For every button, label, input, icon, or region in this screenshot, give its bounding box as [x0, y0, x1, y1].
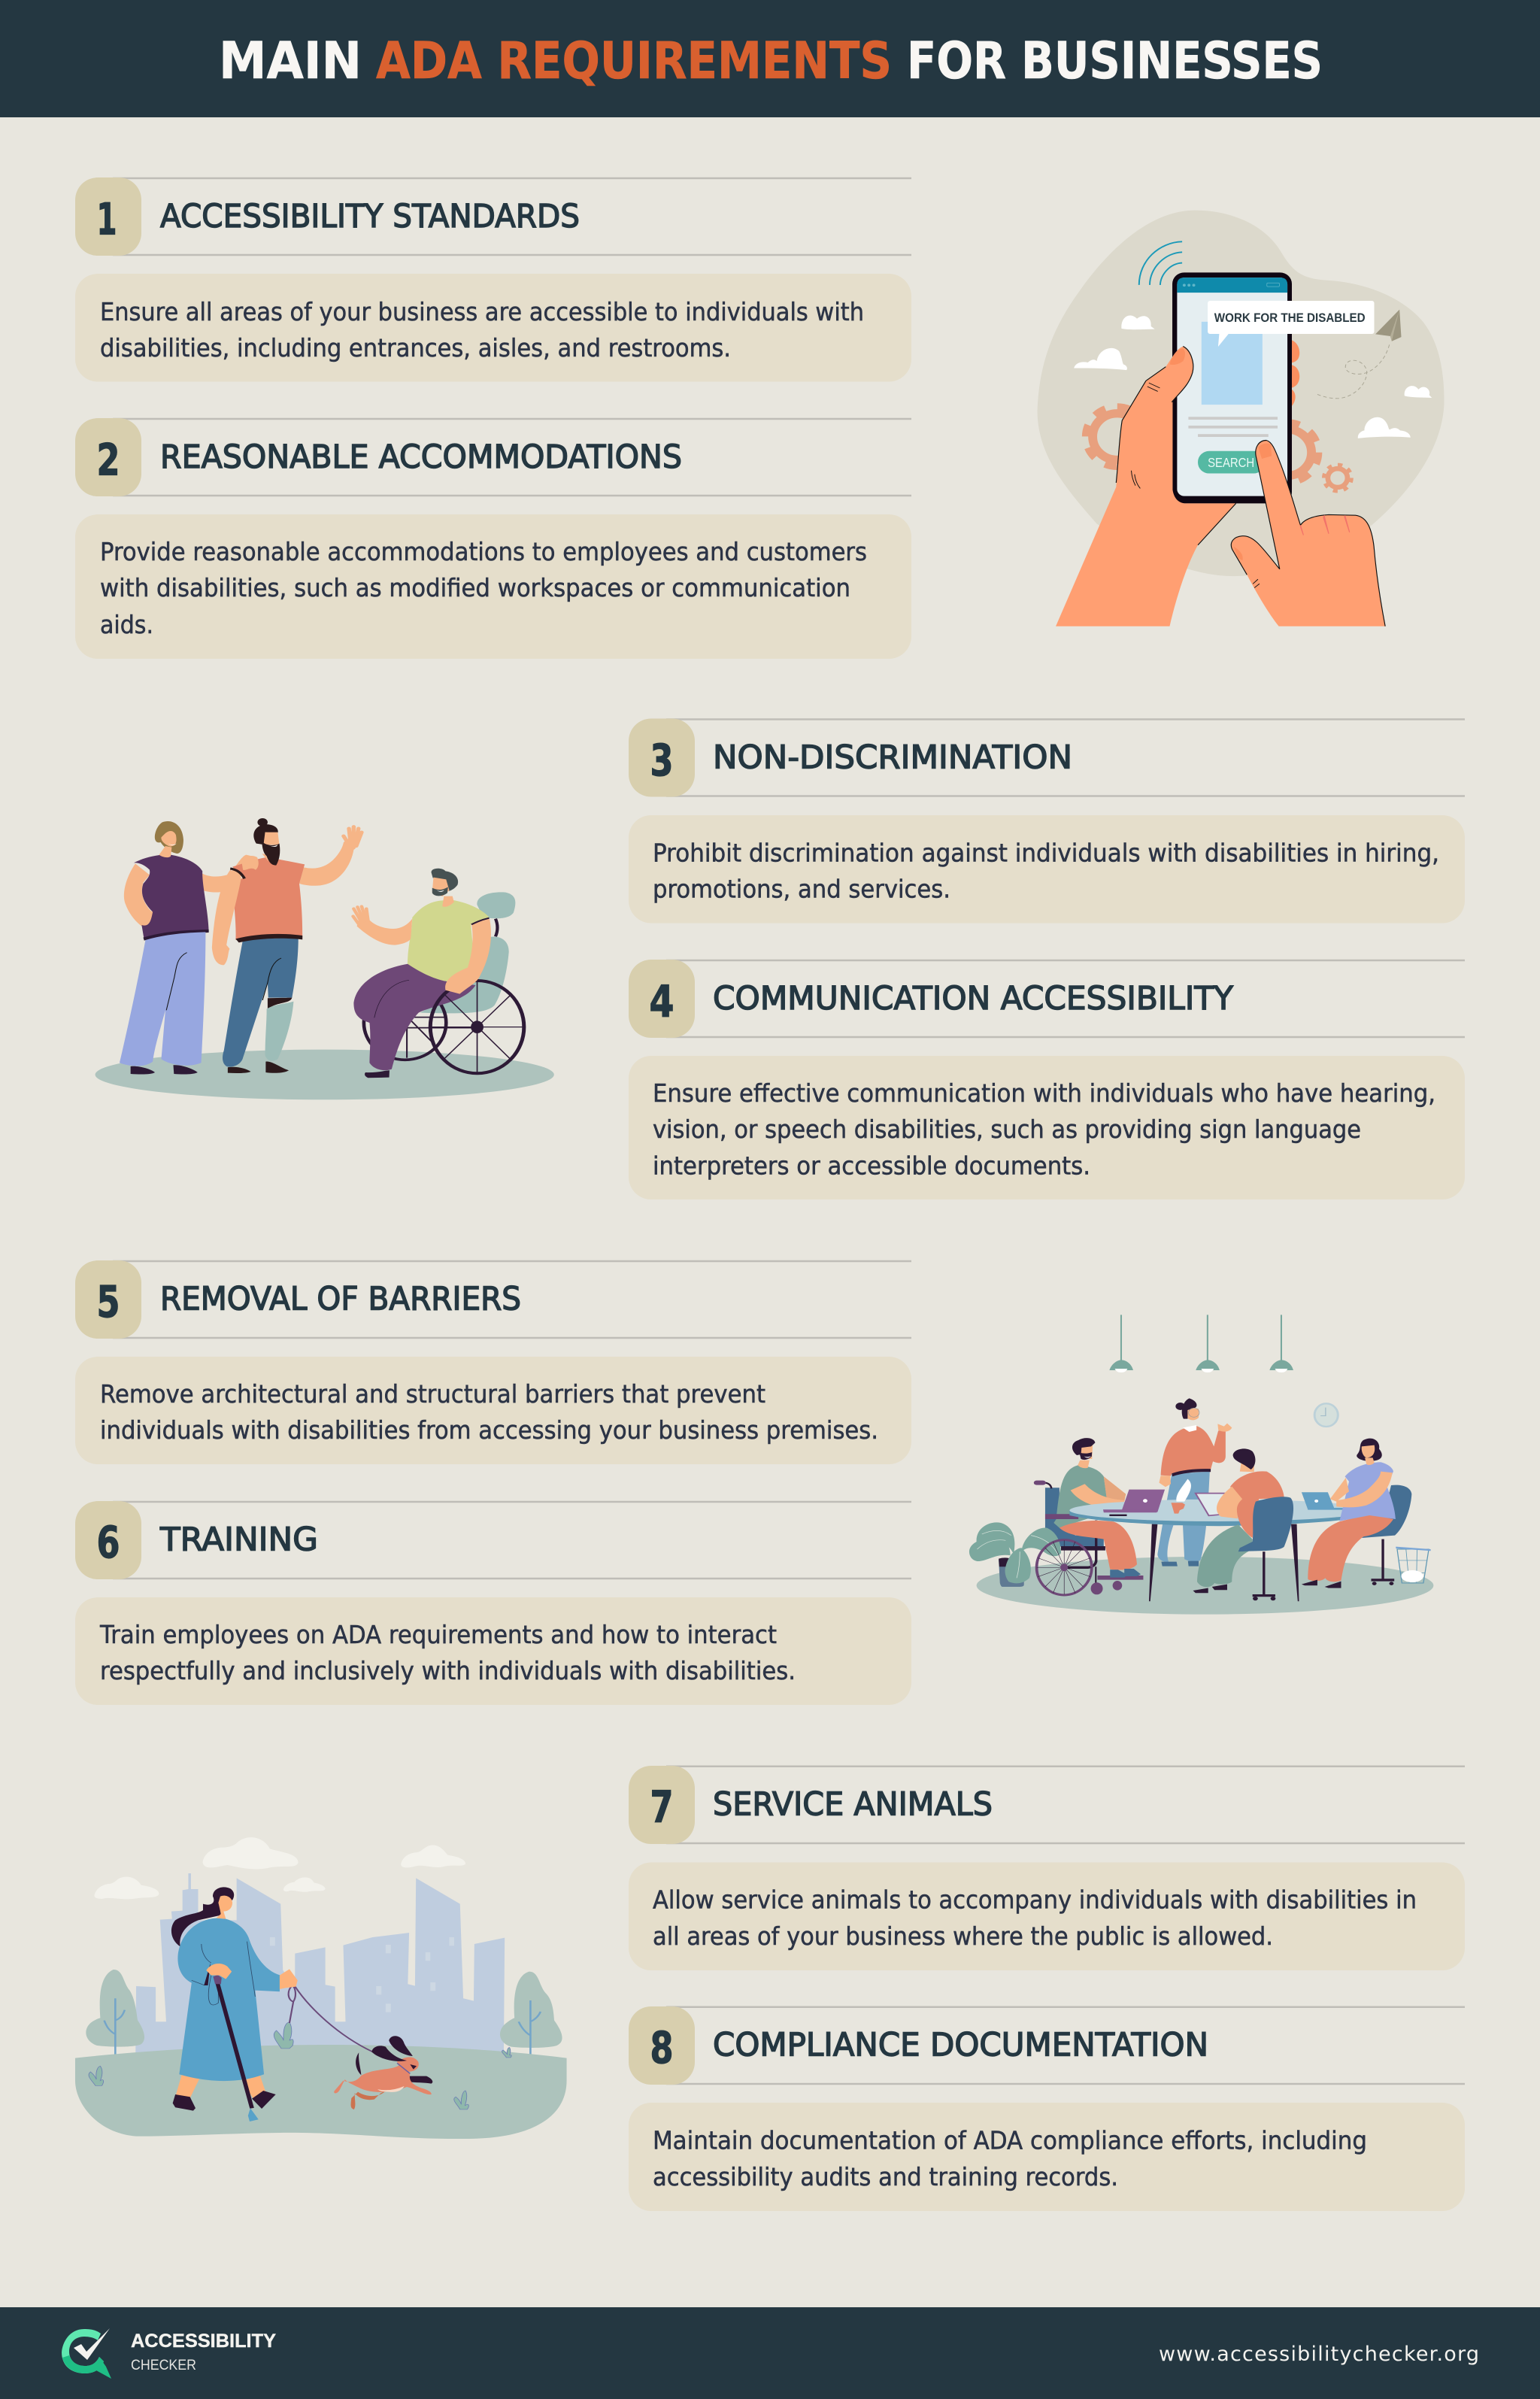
- description card 4: vision, or speech disabilities, such as providing sign language: [653, 1115, 1361, 1144]
- description card 5: individuals with disabilities from accessing your business premises.: [100, 1415, 878, 1445]
- description card 3: [629, 815, 1465, 924]
- standing woman: [1157, 1398, 1232, 1566]
- panel: requirement 7 service animals: [629, 1766, 1465, 1970]
- description card 4: [629, 1056, 1465, 1200]
- description card 7: all areas of your business where the public is allowed.: [653, 1921, 1273, 1951]
- number badge 5: 5: [96, 1276, 120, 1327]
- heading 8: COMPLIANCE DOCUMENTATION: [713, 2026, 1208, 2064]
- city skyline: [135, 1873, 505, 2058]
- panel: requirement 1 accessibility standards: [75, 177, 911, 382]
- number badge 1: [75, 177, 141, 256]
- heading 3: NON-DISCRIMINATION: [713, 739, 1072, 776]
- panel: requirement 3 non-discrimination: [629, 719, 1465, 924]
- seated woman with laptop: [1302, 1439, 1411, 1588]
- description card 1: disabilities, including entrances, aisles, and restrooms.: [100, 333, 731, 362]
- description card 6: respectfully and inclusively with individuals with disabilities.: [100, 1656, 796, 1685]
- speech bubble label: WORK FOR THE DISABLED: [1214, 311, 1366, 325]
- description card 4: interpreters or accessible documents.: [653, 1151, 1090, 1181]
- number badge 7: 7: [650, 1782, 674, 1833]
- header band with title: [0, 0, 1540, 117]
- logo mark: [62, 2328, 111, 2379]
- number badge 1: 1: [96, 194, 117, 245]
- trees: [86, 1970, 562, 2060]
- number badge 5: [75, 1260, 141, 1339]
- illustration: hands holding a smartphone: [1038, 211, 1445, 626]
- description card 8: Maintain documentation of ADA compliance efforts, including: [653, 2125, 1367, 2155]
- number badge 3: 3: [650, 735, 674, 786]
- number badge 2: [75, 418, 141, 496]
- heading 2: REASONABLE ACCOMMODATIONS: [160, 438, 682, 476]
- wall clock: [1314, 1403, 1338, 1427]
- footer band: [0, 2307, 1540, 2399]
- description card 8: [629, 2103, 1465, 2211]
- number badge 8: [629, 2006, 695, 2085]
- description card 2: Provide reasonable accommodations to employees and customers: [100, 537, 867, 566]
- panel: requirement 2 reasonable accommodations: [75, 418, 911, 659]
- number badge 7: [629, 1766, 695, 1844]
- description card 2: [75, 514, 911, 659]
- description card 2: with disabilities, such as modified workspaces or communication: [100, 573, 850, 602]
- header band with title: FOR BUSINESSES: [907, 32, 1323, 91]
- description card 6: [75, 1597, 911, 1705]
- description card 8: accessibility audits and training records.: [653, 2162, 1118, 2191]
- website address: www.accessibilitychecker.org: [1159, 2343, 1479, 2366]
- wheelchair man with laptop: [1034, 1438, 1143, 1589]
- number badge 3: [629, 719, 695, 797]
- waste basket: [1396, 1547, 1431, 1583]
- number badge 6: [75, 1501, 141, 1579]
- plant in pot: [969, 1522, 1061, 1587]
- logo wordmark: [131, 2331, 276, 2373]
- logo wordmark: CHECKER: [131, 2358, 196, 2373]
- description card 2: aids.: [100, 610, 153, 639]
- description card 1: Ensure all areas of your business are accessible to individuals with: [100, 297, 864, 326]
- description card 7: [629, 1862, 1465, 1970]
- description card 4: Ensure effective communication with individuals who have hearing,: [653, 1078, 1435, 1108]
- description card 3: promotions, and services.: [653, 874, 950, 904]
- heading 7: SERVICE ANIMALS: [713, 1785, 993, 1823]
- heading 1: ACCESSIBILITY STANDARDS: [160, 198, 580, 235]
- heading 6: TRAINING: [159, 1521, 318, 1558]
- panel: requirement 8 compliance documentation: [629, 2006, 1465, 2211]
- illustration: team meeting around a table with wheelchair user: [969, 1315, 1433, 1615]
- leash: [289, 1985, 373, 2052]
- man with prosthetic leg: [212, 818, 362, 1073]
- description card 7: Allow service animals to accompany individuals with disabilities in: [653, 1885, 1417, 1915]
- seated man from behind: [1193, 1448, 1293, 1600]
- description card 6: Train employees on ADA requirements and how to interact: [99, 1620, 777, 1649]
- illustration: woman with cane walking a service dog: [75, 1837, 567, 2139]
- speech bubble label: [1208, 301, 1375, 347]
- header band with title: MAIN: [219, 32, 362, 91]
- illustration: three people, one with prosthetic leg and one in wheelchair: [95, 818, 554, 1099]
- description card 5: Remove architectural and structural barriers that prevent: [100, 1379, 765, 1409]
- table with laptops: [1069, 1479, 1369, 1601]
- heading 5: REMOVAL OF BARRIERS: [160, 1280, 521, 1318]
- number badge 4: [629, 960, 695, 1038]
- panel: requirement 4 communication accessibility: [629, 960, 1465, 1200]
- description card 1: [75, 274, 911, 382]
- number badge 6: 6: [96, 1517, 120, 1568]
- panel: requirement 5 removal of barriers: [75, 1260, 911, 1464]
- number badge 4: 4: [650, 976, 674, 1027]
- man in wheelchair: [353, 869, 524, 1078]
- description card 5: [75, 1357, 911, 1464]
- number badge 8: 8: [650, 2022, 674, 2073]
- number badge 2: 2: [96, 435, 120, 486]
- logo wordmark: ACCESSIBILITY: [131, 2331, 276, 2352]
- woman: [171, 1887, 298, 2121]
- description card 3: Prohibit discrimination against individuals with disabilities in hiring,: [653, 838, 1439, 868]
- panel: requirement 6 training: [75, 1501, 911, 1705]
- service dog: [334, 2036, 432, 2109]
- header band with title: ADA REQUIREMENTS: [376, 32, 892, 91]
- heading 4: COMMUNICATION ACCESSIBILITY: [713, 980, 1234, 1018]
- ground: [75, 2045, 567, 2139]
- wheelchair wheel: [1037, 1540, 1122, 1595]
- woman in purple top: [120, 821, 257, 1075]
- pendant lamps: [1109, 1315, 1293, 1372]
- illustration: hands holding a smartphone: SEARCH: [1208, 456, 1254, 470]
- clouds: [94, 1837, 465, 1899]
